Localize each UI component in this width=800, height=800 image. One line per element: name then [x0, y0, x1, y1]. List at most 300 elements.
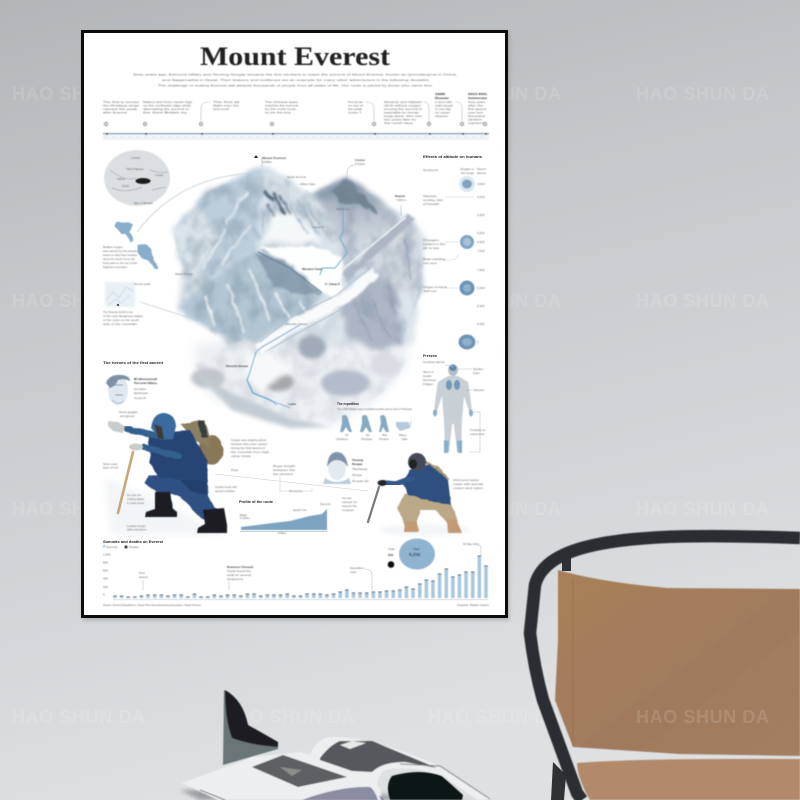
- lower pages: [302, 787, 385, 800]
- timeline notes: 2013 60th: [468, 92, 487, 96]
- chart baseline: [240, 530, 327, 532]
- annotation: first ascent: [139, 571, 148, 579]
- y axis labels: 600: [103, 568, 108, 572]
- panel heading: Effects of altitude on humans: [423, 155, 482, 159]
- altitude labels: 7,500: [477, 268, 485, 272]
- mountain illustration: [172, 155, 425, 428]
- chart labels: Base: [240, 513, 247, 517]
- panel: freezing body figure: [423, 354, 486, 453]
- notes around Hillary: [103, 410, 303, 532]
- lower face: [178, 252, 322, 344]
- symptom notes: may occur: [423, 261, 437, 265]
- body notes: Frostbite on: [470, 428, 486, 432]
- timeline notes: The first air: [213, 100, 240, 104]
- snow shadow: [104, 478, 225, 535]
- brain: [450, 365, 456, 371]
- text: Tenzing bio: Norgay: [352, 462, 363, 466]
- map lines: [110, 170, 168, 191]
- notes around Hillary: the mountain from high: [231, 450, 269, 454]
- altitude labels: 3,000: [477, 182, 485, 186]
- text: expedition subline: The 1953 British team included porters and a host of Sherpas: [337, 407, 412, 411]
- body notes: Dizziness: [423, 378, 436, 382]
- ridge dark line: [258, 252, 322, 293]
- timeline notes: the third British try: [143, 110, 188, 114]
- body notes: Swollen: [473, 367, 484, 371]
- timeline notes: thousand: [468, 114, 485, 118]
- notes around Hillary: during the final ascent of: [231, 446, 265, 450]
- labels on mountain: South Summit: [287, 175, 306, 179]
- intro text: [133, 72, 457, 88]
- symptom notes: [423, 194, 447, 293]
- labels on mountain: Lukla: [288, 402, 296, 406]
- leather seam: [572, 578, 574, 746]
- title: Mount Everest: [200, 42, 390, 71]
- profile of the route: [239, 500, 330, 535]
- left page: [182, 752, 382, 800]
- bubble label: Total: [413, 547, 420, 551]
- body notes: Cerebral edema: [423, 360, 445, 364]
- altitude labels: 6,500: [477, 240, 485, 244]
- watermarks: [12, 84, 770, 727]
- map labels: Lhasa: [155, 173, 164, 177]
- annotation: first ascent: First: [139, 571, 145, 575]
- diagonal grey moraine: [345, 217, 412, 277]
- pack: [424, 460, 450, 480]
- body notes: [423, 360, 486, 436]
- expedition labels: Many: [399, 433, 407, 437]
- timeline notes: the peak: [348, 107, 363, 111]
- poster frame: [81, 30, 509, 620]
- snow field: [258, 245, 342, 300]
- symptom notes: Oxygen is scarce: [423, 285, 447, 289]
- trousers: [397, 488, 458, 525]
- mountain base tone: [172, 165, 425, 345]
- watermarks: HAO SHUN DA: [428, 84, 562, 104]
- timeline axis: [103, 133, 489, 140]
- timeline notes: A storm kills: [435, 100, 453, 104]
- text: Hillary bio: [134, 377, 157, 400]
- symptom notes: vomiting, short: [423, 198, 443, 202]
- column heads: above: [477, 171, 486, 175]
- timeline notes: reachable by human: [384, 110, 419, 114]
- annotation: season note: rules: [350, 570, 357, 574]
- glacier edges: [260, 268, 378, 352]
- notes around Hillary: Rope length: [273, 464, 295, 468]
- timeline notes: 1996: [435, 92, 445, 96]
- area chart: [241, 509, 327, 530]
- mountain summit callouts: [262, 158, 401, 216]
- photo highlight: [340, 741, 366, 749]
- valley snow: [245, 352, 290, 392]
- text: route note: of the route on the south: [103, 318, 139, 322]
- route sketch: [105, 282, 150, 307]
- expedition icons: [340, 415, 412, 432]
- labels on mountain: Namche Bazaar: [226, 364, 249, 368]
- timeline notes: the north face: [384, 121, 414, 125]
- text: Tenzing bio: [352, 458, 369, 483]
- labels on mountain: C. Camp II: [325, 282, 340, 286]
- body notes: Fatigue: [423, 382, 433, 386]
- labels on mountain: South Col: [336, 207, 350, 211]
- lungs: [446, 380, 460, 390]
- text: Hillary bio: Beekeeper: [134, 391, 148, 395]
- timeline notes: lungs alone, then solo: [384, 114, 422, 118]
- glacier band: [258, 272, 376, 350]
- body notes: Short of: [423, 370, 434, 374]
- altitude labels: 7,000: [477, 249, 485, 253]
- body leaders: [445, 365, 480, 452]
- map labels: Bay of Bengal: [134, 201, 153, 205]
- timeline notes: Anniversary: [468, 96, 487, 100]
- altitude labels: [477, 182, 485, 344]
- legend: Summits: [106, 545, 118, 549]
- book interior dark: [388, 772, 463, 800]
- symptom notes: content in the: [423, 242, 445, 246]
- east lower flank: [342, 270, 402, 350]
- body notes: extremities: [470, 432, 485, 436]
- timeline notes: summit: [213, 107, 229, 111]
- expedition labels: Climbers: [336, 437, 348, 441]
- column heads: the lungs: [461, 171, 475, 175]
- text: acclimatization note: final push to the top of the: [103, 261, 137, 265]
- timeline notes: two years later by: [384, 118, 417, 122]
- chart labels: 5,360m: [240, 516, 251, 520]
- notes around Hillary: special insulation: [215, 489, 235, 493]
- climber: Tenzing: [368, 453, 470, 536]
- map labels: CHINA: [131, 156, 140, 160]
- everest south face: [258, 165, 326, 262]
- timeline notes: the Himalaya range: [103, 104, 139, 108]
- expedition labels: Porters: [379, 437, 389, 441]
- leather watermark: HAO SHUN DA: [636, 707, 770, 727]
- notes around Hillary: Ice axe for: [127, 493, 141, 497]
- notes around Hillary: Rope: [231, 468, 239, 472]
- total deaths marker: 219: [388, 553, 393, 557]
- text: route note: The Khumbu Icefall is one: [103, 310, 133, 314]
- notes around Hillary: Snow goggles: [119, 410, 138, 414]
- labels on mountain: West Ridge: [175, 272, 193, 276]
- y axis labels: 1,000: [103, 552, 111, 556]
- symptom notes: Nausea,: [423, 194, 437, 198]
- route sketch lines: [106, 287, 133, 305]
- rock texture: [172, 165, 425, 345]
- notes around Hillary: fourteen kilos were carried: [231, 442, 267, 446]
- book shadow: [180, 790, 480, 800]
- watermarks: HAO SHUN DA: [12, 291, 146, 311]
- bottom chart: ascents and deaths: [103, 538, 489, 607]
- chair frame: [530, 536, 800, 800]
- valley river repeat: [247, 352, 290, 408]
- labels on mountain: Western Cwm: [302, 267, 322, 271]
- intro text: and Sagarmatha in Nepal. Their bravery and resilience set an example for many other adventurers in the following decades.: [162, 78, 430, 82]
- rope line: [215, 474, 368, 492]
- glove: [378, 480, 386, 486]
- lower valley base tone: [190, 320, 410, 425]
- timeline notes: proving the summit is: [384, 107, 423, 111]
- text: acclimatization note: [103, 245, 137, 269]
- notes around Hillary: and gloves: [120, 414, 135, 418]
- valley texture: [195, 310, 412, 425]
- labels on mountain: [175, 156, 407, 406]
- text: acclimatization note: above the South Col on the: [103, 257, 135, 261]
- east upper flank: [362, 218, 422, 296]
- expedition labels: Sherpas: [361, 437, 373, 441]
- sketch label: Khumbu Icefall: [134, 282, 150, 286]
- hood: [151, 413, 176, 440]
- left page photo: [252, 755, 347, 787]
- notes around Tenzing: [342, 478, 483, 512]
- annotation: season note: Expedition: [350, 566, 364, 570]
- Nepal highlight: [136, 178, 150, 184]
- panel: effects of altitude on humans: [423, 155, 486, 350]
- map labels: INDIA: [117, 177, 125, 181]
- snow on south face: [262, 210, 318, 245]
- y axis labels: [103, 552, 111, 596]
- altitude labels: 4,000: [477, 195, 485, 199]
- body notes: breath: [423, 374, 432, 378]
- backpack: [180, 420, 223, 465]
- altitude labels: 8,000: [477, 286, 485, 290]
- text: Hillary bio: New Zealand: [134, 387, 146, 391]
- watermarks: HAO SHUN DA: [428, 499, 562, 519]
- timeline: [103, 92, 489, 140]
- legend: Deaths: [129, 545, 139, 549]
- right page arch: [310, 737, 490, 800]
- lower face highlights: [205, 270, 308, 333]
- timeline notes: on the northeast ridge while: [143, 104, 191, 108]
- notes around Tenzing: secure the: [342, 504, 357, 508]
- annotation: Tenzing and Hillary note: peak for several: [227, 573, 251, 577]
- symptom notes: Brain swelling: [423, 257, 445, 261]
- annotation: Tenzing and Hillary note: Nepal closed the: [227, 569, 251, 573]
- timeline notes: Disaster: [435, 96, 450, 100]
- legs: [145, 473, 223, 520]
- notes around Hillary: cutting steps: [127, 497, 144, 501]
- labels on mountain: Nuptse: [395, 194, 405, 198]
- callout arcs: [137, 173, 257, 333]
- timeline notes: Sixty years: [468, 100, 486, 104]
- lower face dark core: [255, 252, 322, 296]
- labels on mountain: Hillary Step: [300, 182, 316, 186]
- timeline year markers: [104, 122, 487, 126]
- west face highlights: [202, 190, 250, 270]
- map labels: Delhi: [122, 184, 129, 188]
- text: acclimatization note: Bottled oxygen: [103, 245, 123, 249]
- text: Tenzing bio: 39 years old: [352, 479, 369, 483]
- text: Hillary bio: Percival Hillary: [134, 381, 157, 385]
- notes around Hillary: Double boots with: [215, 485, 237, 489]
- annotation leaders: [143, 545, 481, 590]
- notes around Tenzing: cotton and nylon: [453, 486, 483, 490]
- watermarks: HAO SHUN DA: [12, 84, 146, 104]
- body notes: Infection: [473, 388, 485, 392]
- altitude labels: 8,300: [477, 304, 485, 308]
- nuptse dark crest: [332, 180, 378, 214]
- book edge: [400, 764, 490, 799]
- ice axe: [118, 452, 133, 513]
- rear chair leg: [551, 762, 566, 800]
- notes around Hillary: layer of suit: [103, 466, 119, 470]
- notes around Hillary: Wool outer: [103, 462, 117, 466]
- column heads: [423, 167, 486, 175]
- river: [247, 207, 347, 405]
- timeline notes: on upper: [435, 110, 450, 114]
- watermarks: HAO SHUN DA: [636, 84, 770, 104]
- heading: Freezes: [423, 354, 437, 358]
- labels on mountain: Lhotse: [355, 158, 365, 162]
- intro text: Sixty years ago, Edmund Hillary and Tenzing Norgay became the first climbers to reach the summit of Mount Everest, known as Qomolangma in China,: [133, 72, 457, 76]
- timeline notes: by the north route: [265, 107, 296, 111]
- oxygen circles: [458, 176, 476, 350]
- climber icons: acclimatization: [115, 222, 158, 269]
- summit marker: [254, 155, 258, 158]
- altitude labels: 0: [477, 340, 479, 344]
- heading: expedition: The expedition: [337, 402, 359, 406]
- notes around Hillary: camp ninety: [231, 454, 252, 458]
- watermarks: HAO SHUN DA: [636, 707, 770, 727]
- watermarks: HAO SHUN DA: [428, 707, 562, 727]
- east flank gullies: [358, 240, 411, 340]
- timeline notes: Messner and Habeler: [384, 100, 422, 104]
- west face lighter band: [172, 210, 215, 282]
- notes around Tenzing: used to: [342, 500, 358, 504]
- expedition labels: 20: [366, 433, 370, 437]
- watermarks: HAO SHUN DA: [636, 499, 770, 519]
- profile of the route: Profile of the route: [239, 500, 273, 504]
- column heads: Metres: [477, 167, 486, 171]
- snow shadow: [380, 524, 470, 536]
- arms: [127, 429, 178, 456]
- timeline connector curves: [201, 102, 462, 125]
- hood: [408, 453, 426, 471]
- left page edge: [200, 790, 225, 800]
- photo: grey vase object: [223, 690, 278, 765]
- timeline notes: over four: [468, 110, 483, 114]
- timeline notes: after the: [468, 104, 483, 108]
- notes around Tenzing: made with special: [453, 482, 483, 486]
- timeline notes: after Everest: [103, 110, 127, 114]
- chart baseline: [113, 598, 488, 600]
- text: Tenzing bio: Sherpa: [352, 473, 362, 477]
- text: route note: [103, 310, 143, 326]
- chart title: Summits and deaths on Everest: [103, 540, 164, 544]
- total summit bubble: [399, 538, 435, 570]
- timeline notes: Mallory and Irvine vanish high: [143, 100, 192, 104]
- bubble label: 6,206: [409, 552, 421, 557]
- timeline notes: The Chinese team: [265, 100, 299, 104]
- expedition labels: [336, 433, 408, 441]
- y axis labels: 400: [103, 576, 108, 580]
- symptom notes: "death zone": [423, 289, 437, 293]
- watermarks: HAO SHUN DA: [12, 707, 146, 727]
- leader lines: [444, 197, 474, 288]
- notes around Hillary: between the: [273, 468, 295, 472]
- arm: [384, 478, 412, 484]
- heading: heroes: The heroes of the first ascent: [103, 361, 164, 365]
- labels on mountain: 7,861m: [396, 198, 407, 202]
- notes around Hillary: two climbers: [273, 472, 294, 476]
- timeline notes: in one day: [435, 107, 452, 111]
- expedition labels: 15: [345, 433, 349, 437]
- notes around Hillary: with crampons: [127, 528, 147, 532]
- text: acclimatization note: teams to help them breathe: [103, 253, 137, 257]
- ice axe: [368, 487, 379, 522]
- symptom notes: of breath: [423, 202, 439, 206]
- text: acclimatization note: was carried by the assault: [103, 249, 137, 253]
- back rail bracket: [562, 558, 571, 571]
- summit dark streaks: [265, 192, 290, 216]
- text: Tenzing bio: Tenzing: [352, 458, 363, 462]
- watermarks: HAO SHUN DA: [428, 291, 562, 311]
- chart labels: 8.8km: [278, 531, 287, 535]
- source lines: Source: Everest Expeditions, China Tibet Mountaineering Association, Nepal Tourism: [103, 603, 201, 607]
- timeline notes: reached it: [468, 121, 484, 125]
- labels on mountain: 8,848m: [262, 160, 273, 164]
- legend: [103, 545, 139, 549]
- map labels: [117, 156, 164, 205]
- timeline notes: for the first time: [265, 110, 291, 114]
- annotation: peak year: 53 May 2012: [463, 542, 479, 546]
- annotation: Tenzing and Hillary note: [227, 565, 253, 581]
- chart labels: Summit: [320, 502, 330, 506]
- notes around Hillary: 30 metres: [289, 489, 303, 493]
- expedition labels: 362: [382, 433, 387, 437]
- portrait: Hillary: [106, 375, 130, 405]
- south face streaks: [262, 200, 320, 235]
- lower valley shadows: [191, 335, 399, 428]
- annotation: first ascent: ascent: [139, 575, 148, 579]
- jacket: [403, 464, 451, 505]
- photo: armchair: [530, 536, 800, 800]
- watermarks: HAO SHUN DA: [12, 499, 146, 519]
- boots: [404, 519, 462, 533]
- text: route note: side of the mountain: [103, 322, 137, 326]
- text: route note: of the most dangerous stages: [103, 314, 143, 318]
- watermarks: HAO SHUN DA: [222, 707, 356, 727]
- chart labels: [240, 502, 330, 535]
- climber: Hillary: [104, 413, 227, 535]
- timeline notes: climbers: [468, 118, 483, 122]
- text: acclimatization note: highest mountain: [103, 265, 127, 269]
- annotation: season note: [350, 566, 364, 574]
- notes around Hillary: in hard snow: [127, 501, 145, 505]
- timeline notes: First woman: [348, 100, 363, 104]
- altitude labels: 8,500: [477, 322, 485, 326]
- intro text: The challenge of scaling Everest still attracts thousands of people from all walks of life. Our route is paved by those who came first.: [158, 84, 433, 88]
- hands and feet: [433, 410, 473, 453]
- text: Hillary bio: Edmund: [134, 377, 157, 381]
- labels on mountain: 8,516m: [355, 162, 366, 166]
- column heads: Oxygen in: [460, 167, 474, 171]
- timeline notes: climb without oxygen: [384, 104, 421, 108]
- timeline notes: named the peak: [103, 107, 138, 111]
- total deaths marker: Total: [388, 547, 395, 551]
- timeline notes: [103, 92, 487, 125]
- locator map: [104, 150, 170, 206]
- timeline notes: reaches the summit: [265, 104, 298, 108]
- everest west face: [176, 165, 265, 283]
- total deaths marker: [388, 547, 395, 568]
- timeline notes: eight people: [435, 104, 453, 108]
- timeline notes: first ascent: [468, 107, 486, 111]
- notes around Hillary: Leather boots: [127, 524, 146, 528]
- timeline notes: slopes: [435, 114, 449, 118]
- body notes: brain: [473, 371, 480, 375]
- source lines: Graphic: Rafael Castro: [457, 603, 489, 607]
- timeline notes: flight over the: [213, 104, 239, 108]
- timeline notes: on top of: [348, 104, 363, 108]
- body silhouette: [434, 364, 472, 452]
